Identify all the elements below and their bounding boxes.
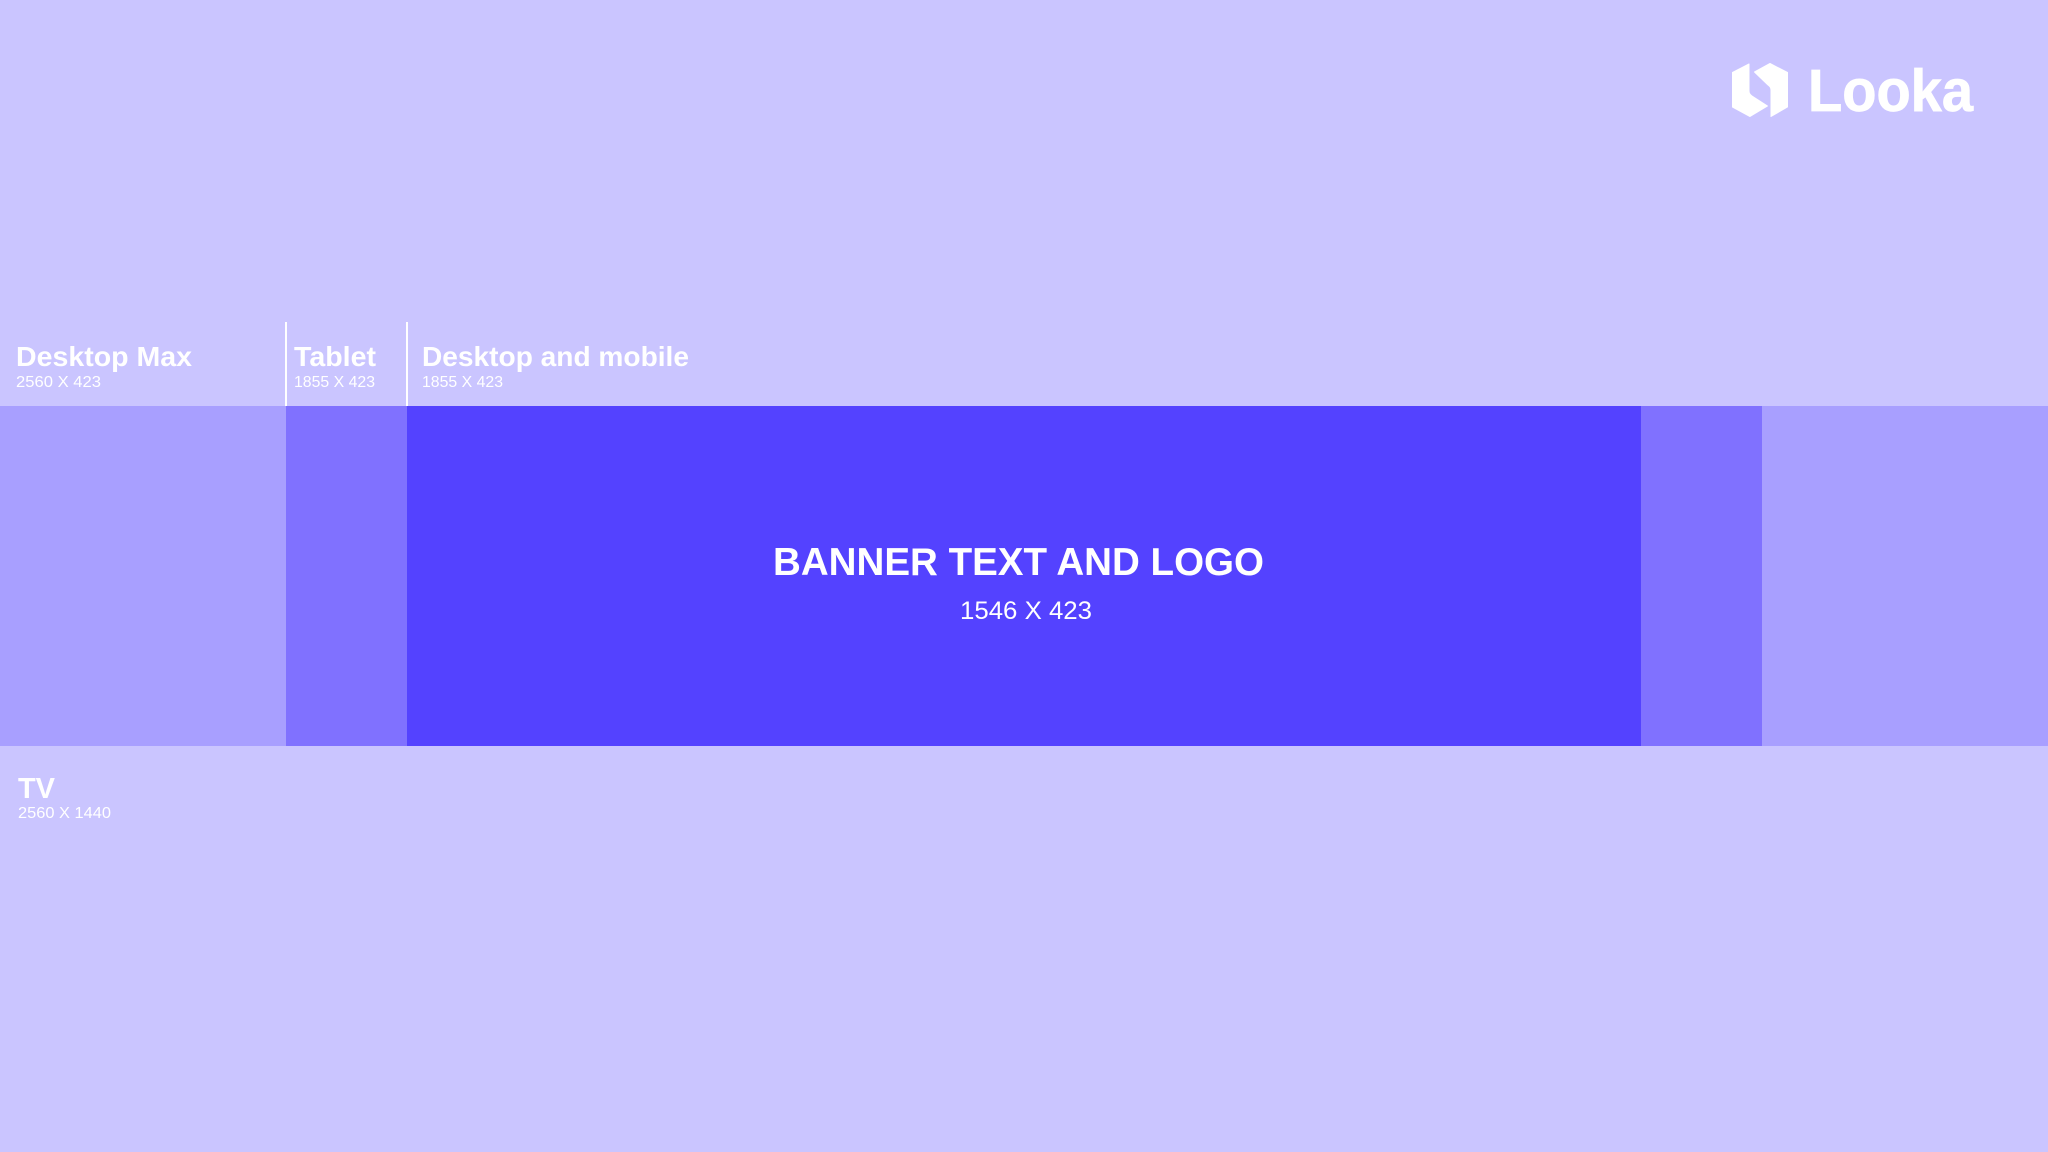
label: Desktop Max	[16, 341, 192, 391]
divider: desktop and mobile left edge	[406, 322, 408, 406]
label: TV: 2560 X 1440	[18, 805, 111, 822]
heading: banner text and logo: 1546 X 423	[960, 597, 1092, 625]
divider: tablet left edge	[285, 322, 287, 406]
icon: Looka hexagon mark	[1732, 64, 1788, 116]
heading: banner text and logo	[773, 541, 1264, 625]
logo: Looka	[1732, 58, 1974, 124]
zone: banner text and logo safe area	[407, 406, 1641, 746]
label: TV	[18, 773, 111, 822]
wordmark: Looka	[1808, 58, 1974, 124]
label: Desktop and mobile	[422, 341, 689, 391]
heading: banner text and logo: BANNER TEXT AND LOGO	[773, 541, 1264, 584]
label: Desktop Max: Desktop Max	[16, 341, 192, 372]
label: Tablet: 1855 X 423	[294, 374, 375, 391]
banner zones	[0, 406, 2048, 746]
zone: tablet	[286, 406, 1762, 746]
label: Tablet	[294, 341, 376, 391]
label: TV: TV	[18, 773, 56, 805]
label: Tablet: Tablet	[294, 341, 376, 372]
label: Desktop and mobile: Desktop and mobile	[422, 341, 689, 372]
label: Desktop and mobile: 1855 X 423	[422, 374, 503, 391]
zone: desktop max	[0, 406, 2048, 746]
label: Desktop Max: 2560 X 423	[16, 374, 101, 391]
